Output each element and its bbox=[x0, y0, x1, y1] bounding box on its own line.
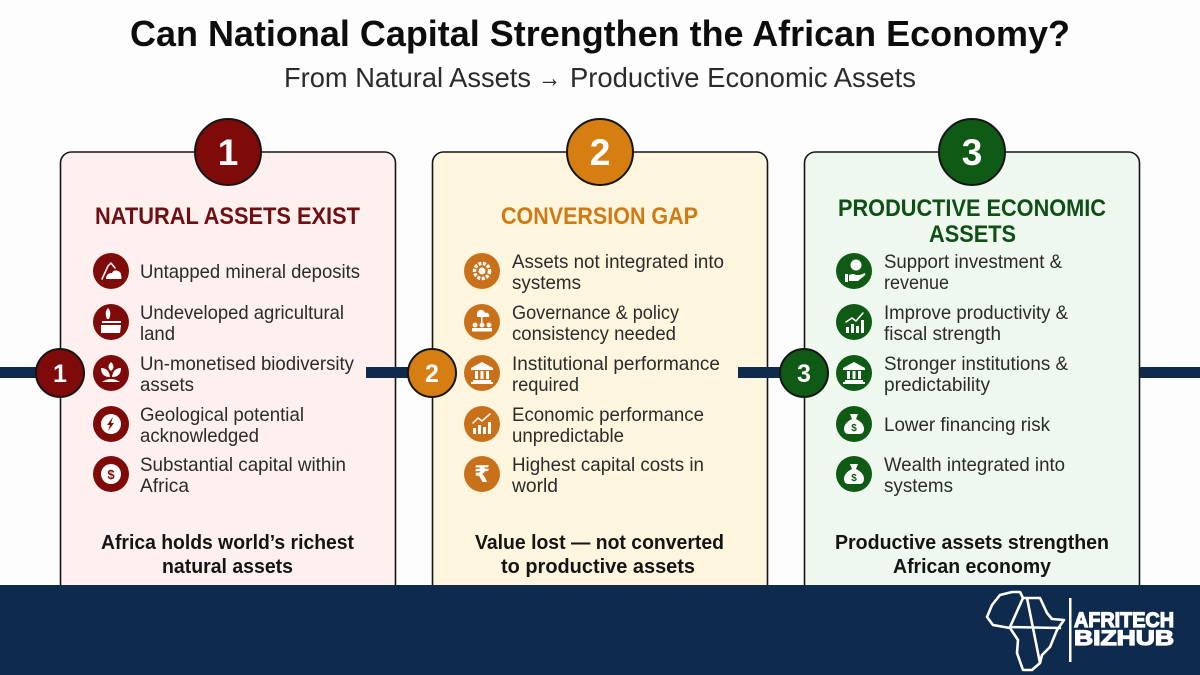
list item: stronger institutions bbox=[836, 353, 1068, 396]
step badge 1 top bbox=[195, 119, 261, 185]
step badge 3 on timeline: 3 bbox=[797, 360, 811, 388]
list item: institutional performance: Institutional performance bbox=[512, 353, 720, 375]
list item: lower financing risk bbox=[836, 406, 1050, 442]
list item: support investment: Support investment & bbox=[884, 251, 1062, 273]
list item: untapped mineral deposits: Untapped mineral deposits bbox=[140, 261, 360, 283]
list item: highest capital costs: ₹ bbox=[474, 462, 490, 488]
heading: productive economic assets bbox=[838, 195, 1106, 248]
list item: governance and policy: Governance & policy bbox=[512, 302, 679, 324]
footer band bbox=[0, 585, 1200, 675]
list item: substantial capital within africa: $ bbox=[107, 467, 115, 482]
list item: assets not integrated: Assets not integrated into bbox=[512, 251, 724, 273]
step badge 3 top bbox=[939, 119, 1005, 185]
list item: un-monetised biodiversity assets: Un-monetised biodiversity bbox=[140, 353, 354, 375]
list item: support investment bbox=[836, 251, 1062, 294]
list item: wealth integrated: $ bbox=[851, 473, 857, 484]
step badge 2 top: 2 bbox=[590, 132, 610, 173]
list item: stronger institutions: predictability bbox=[884, 374, 990, 396]
panel takeaway: value lost: Value lost — not converted bbox=[475, 531, 724, 554]
logo wordmark: AFRITECH bbox=[1074, 609, 1174, 632]
subtitle bbox=[284, 62, 916, 93]
list item: undeveloped agricultural land bbox=[93, 302, 344, 345]
list item: institutional performance bbox=[464, 353, 720, 396]
panel takeaway: productive assets bbox=[835, 531, 1109, 578]
subtitle: From Natural Assets bbox=[284, 62, 531, 93]
list item: support investment: revenue bbox=[884, 272, 949, 294]
heading: productive economic assets: PRODUCTIVE ECONOMIC bbox=[838, 195, 1106, 222]
list item: improve productivity: fiscal strength bbox=[884, 323, 1001, 345]
list item: improve productivity bbox=[836, 302, 1068, 345]
panel: conversion gap bbox=[432, 152, 768, 597]
list item: substantial capital within africa: Substantial capital within bbox=[140, 454, 346, 476]
step badge 3 top: 3 bbox=[962, 132, 982, 173]
list item: substantial capital within africa: Africa bbox=[140, 475, 189, 497]
list item: highest capital costs: Highest capital costs in bbox=[512, 454, 704, 476]
list item: geological potential acknowledged: acknowledged bbox=[140, 425, 259, 447]
step badge 1 on timeline: 1 bbox=[53, 360, 67, 388]
list item: governance and policy: consistency needed bbox=[512, 323, 676, 345]
list item: assets not integrated: systems bbox=[512, 272, 581, 294]
logo divider bbox=[1069, 598, 1072, 662]
list item: economic performance: unpredictable bbox=[512, 425, 624, 447]
list item: assets not integrated bbox=[464, 251, 724, 294]
list item: lower financing risk: Lower financing risk bbox=[884, 414, 1050, 436]
list item: geological potential acknowledged bbox=[93, 404, 304, 447]
icon: africa outline bbox=[987, 592, 1064, 670]
logo wordmark bbox=[1074, 609, 1174, 650]
logo: afritech bizhub bbox=[987, 592, 1174, 670]
panel takeaway: productive assets: Productive assets strengthen bbox=[835, 531, 1109, 554]
heading: productive economic assets: ASSETS bbox=[929, 221, 1016, 248]
list item: wealth integrated: systems bbox=[884, 475, 953, 497]
list item: stronger institutions: Stronger institutions & bbox=[884, 353, 1068, 375]
step badge 1 top: 1 bbox=[218, 132, 238, 173]
list item: wealth integrated bbox=[836, 454, 1065, 497]
list item: lower financing risk: $ bbox=[851, 423, 857, 434]
panel: natural assets exist bbox=[60, 152, 396, 597]
list item: highest capital costs: world bbox=[511, 475, 558, 497]
panel takeaway: natural assets: Africa holds world’s richest bbox=[101, 531, 354, 554]
list item: undeveloped agricultural land: Undeveloped agricultural bbox=[140, 302, 344, 324]
subtitle: → bbox=[538, 62, 561, 93]
heading: conversion gap: CONVERSION GAP bbox=[501, 203, 698, 230]
list item: economic performance: Economic performance bbox=[512, 404, 704, 426]
panel: productive economic assets bbox=[804, 152, 1140, 597]
list item: governance and policy bbox=[464, 302, 679, 345]
heading: natural assets exist: NATURAL ASSETS EXIST bbox=[95, 203, 360, 230]
list item: un-monetised biodiversity assets: assets bbox=[140, 374, 194, 396]
step badge 1 on timeline bbox=[36, 349, 84, 397]
list item: undeveloped agricultural land: land bbox=[140, 323, 175, 345]
subtitle: Productive Economic Assets bbox=[570, 62, 916, 93]
list item: institutional performance: required bbox=[512, 374, 579, 396]
list item: wealth integrated: Wealth integrated into bbox=[884, 454, 1065, 476]
step badge 2 on timeline: 2 bbox=[425, 360, 439, 388]
list item: substantial capital within africa bbox=[93, 454, 346, 497]
step badge 2 on timeline bbox=[408, 349, 456, 397]
title: Can National Capital Strengthen the African Economy? bbox=[130, 13, 1070, 54]
connector bars bbox=[0, 367, 1200, 378]
panel takeaway: value lost bbox=[475, 531, 724, 578]
list item: improve productivity: Improve productivity & bbox=[884, 302, 1068, 324]
step badge 3 on timeline bbox=[780, 349, 828, 397]
list item: economic performance bbox=[464, 404, 704, 447]
step badge 2 top bbox=[567, 119, 633, 185]
list item: un-monetised biodiversity assets bbox=[93, 353, 354, 396]
list item: highest capital costs bbox=[464, 454, 704, 497]
list item: untapped mineral deposits bbox=[93, 253, 360, 289]
panel takeaway: natural assets bbox=[101, 531, 354, 578]
panel takeaway: productive assets: African economy bbox=[893, 555, 1052, 578]
panel takeaway: value lost: to productive assets bbox=[501, 555, 695, 578]
panel takeaway: natural assets: natural assets bbox=[162, 555, 293, 578]
list item: geological potential acknowledged: Geological potential bbox=[140, 404, 304, 426]
logo wordmark: BIZHUB bbox=[1074, 627, 1174, 650]
